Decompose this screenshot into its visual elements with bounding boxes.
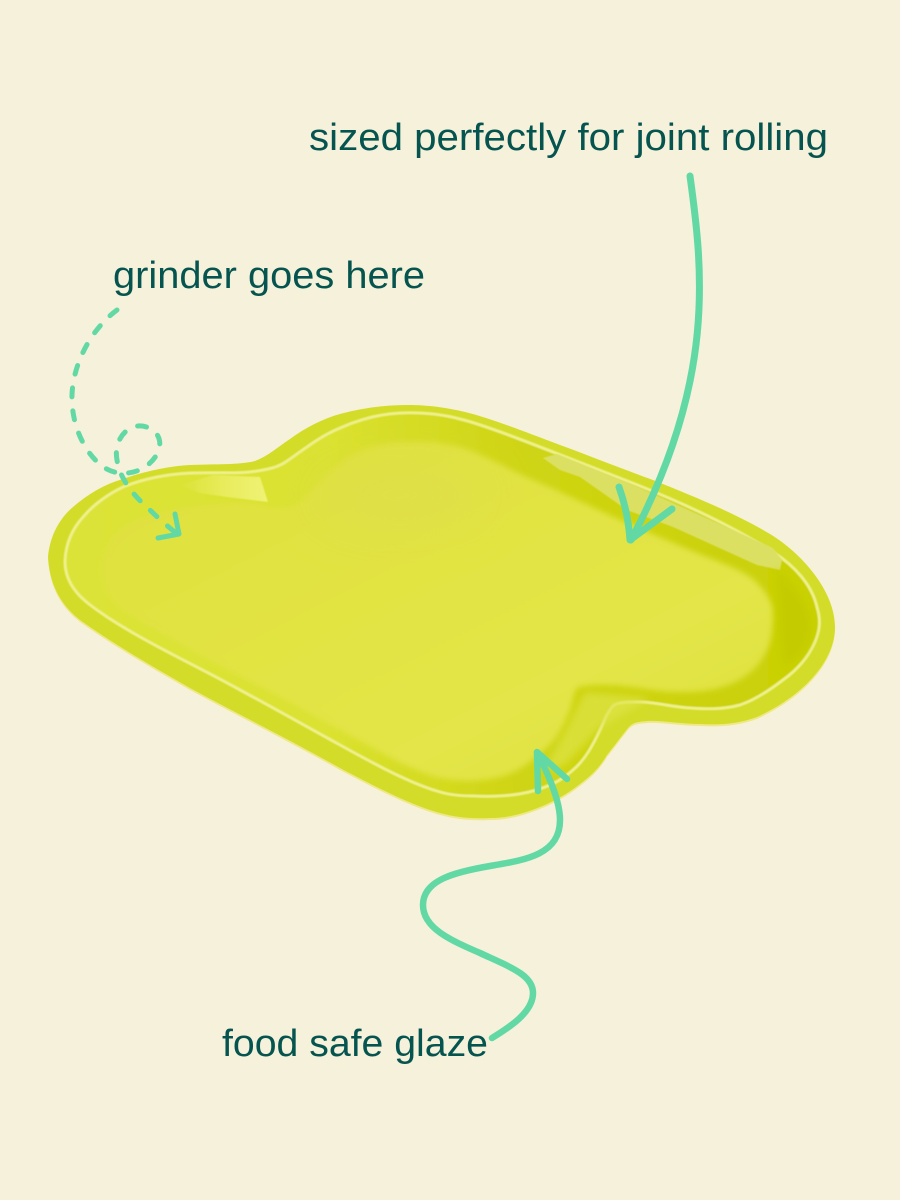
arrow: glaze [423,752,567,1038]
label: glaze: food safe glaze [222,1023,488,1065]
shading: lower right shelf [545,692,650,770]
highlight: top left glaze [180,475,268,502]
arrow: joint rolling [619,176,699,540]
tray well [103,442,773,781]
arrow: grinder dashed [72,310,179,538]
label: grinder: grinder goes here [113,255,425,297]
yellow tray [48,405,835,820]
shading: dull upper well [310,460,490,530]
shading: right shelf [775,568,812,668]
label: joint rolling: sized perfectly for joint rolling [309,117,828,159]
highlight: top right glaze [543,454,782,570]
